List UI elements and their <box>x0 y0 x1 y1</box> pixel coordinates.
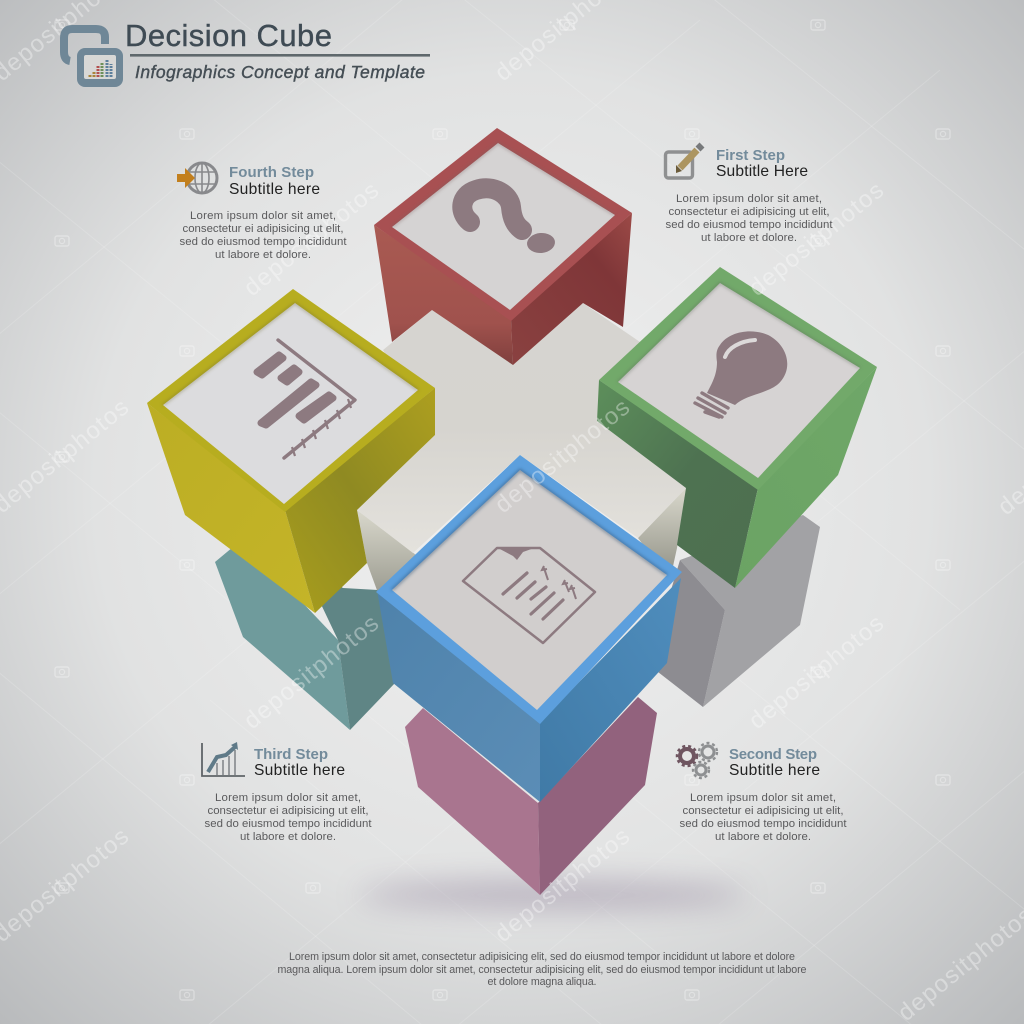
step: fourth: Lorem ipsum dolor sit amet, <box>190 210 336 222</box>
watermarks: depositphotos <box>744 610 889 735</box>
title: Decision Cube <box>125 18 332 53</box>
cube: teal lower <box>215 547 395 730</box>
step: third: ut labore et dolore. <box>240 831 336 843</box>
step: first: Lorem ipsum dolor sit amet, <box>676 193 822 205</box>
cube: red question <box>374 128 632 365</box>
step: second <box>677 743 847 843</box>
central cross block <box>357 303 686 612</box>
step: third <box>202 742 372 843</box>
watermarks: depositphotos <box>490 823 635 948</box>
yellow rim <box>147 289 435 512</box>
step: fourth: consectetur ei adipisicing ut elit, <box>182 223 344 235</box>
step: third: Lorem ipsum dolor sit amet, <box>215 792 361 804</box>
step: first: sed do eiusmod tempo incididunt <box>666 219 833 231</box>
yellow panel <box>163 303 418 504</box>
step: third: Third Step <box>254 746 328 763</box>
green panel <box>618 283 860 478</box>
step: first: ut labore et dolore. <box>701 232 797 244</box>
blue rim <box>376 455 682 724</box>
step: third: Subtitle here <box>254 762 345 779</box>
cube: green bulb <box>597 267 877 588</box>
red rim <box>374 128 632 321</box>
step: fourth: sed do eiusmod tempo incididunt <box>180 236 347 248</box>
step: first: consectetur ei adipisicing ut elit, <box>668 206 830 218</box>
icon: gears <box>677 743 717 778</box>
cube: gray lower <box>658 515 820 707</box>
step: first <box>666 145 833 244</box>
footer text: Lorem ipsum dolor sit amet, consectetur adipisicing elit, sed do eiusmod tempor incididunt ut labore et dolore <box>289 951 795 963</box>
green rim <box>599 267 877 490</box>
subtitle: Infographics Concept and Template <box>135 62 425 82</box>
cube: yellow bars <box>147 289 435 613</box>
step: second: ut labore et dolore. <box>715 831 811 843</box>
footer text: magna aliqua. Lorem ipsum dolor sit amet, consectetur adipisicing elit, sed do eiusmod tempor incididunt ut labore <box>278 964 807 976</box>
blue panel <box>392 470 667 710</box>
footer text <box>278 951 807 988</box>
watermarks: depositphotos <box>239 610 384 735</box>
watermarks: depositphotos <box>239 177 384 302</box>
icon: line chart <box>202 742 245 776</box>
ground shadow <box>357 882 747 908</box>
cube: pink lower <box>405 697 657 895</box>
icon: bar chart <box>257 340 355 458</box>
footer text: et dolore magna aliqua. <box>488 976 596 988</box>
step: third: consectetur ei adipisicing ut elit, <box>208 805 368 817</box>
step: fourth: Fourth Step <box>229 164 314 181</box>
step: second: consectetur ei adipisicing ut elit, <box>682 805 844 817</box>
red panel <box>392 143 615 310</box>
watermarks: depositphotos <box>490 394 635 519</box>
step: second: sed do eiusmod tempo incididunt <box>680 818 847 830</box>
step: second: Second Step <box>729 746 817 763</box>
step: third: sed do eiusmod tempo incididunt <box>204 818 372 830</box>
step: fourth <box>177 163 347 261</box>
step: first: Subtitle Here <box>716 163 808 180</box>
logo icon <box>64 29 123 87</box>
step: second: Lorem ipsum dolor sit amet, <box>690 792 836 804</box>
step: second: Subtitle here <box>729 762 820 779</box>
watermarks: depositphotos <box>744 177 889 302</box>
cube: blue document <box>376 455 682 802</box>
icon: pencil and box <box>666 145 702 178</box>
step: fourth: ut labore et dolore. <box>215 249 311 261</box>
icon: globe with arrow <box>177 163 217 193</box>
icon: document <box>463 547 595 643</box>
icon: question mark <box>462 188 556 254</box>
step: fourth: Subtitle here <box>229 181 320 198</box>
step: first: First Step <box>716 147 785 164</box>
icon: light bulb <box>695 331 787 417</box>
